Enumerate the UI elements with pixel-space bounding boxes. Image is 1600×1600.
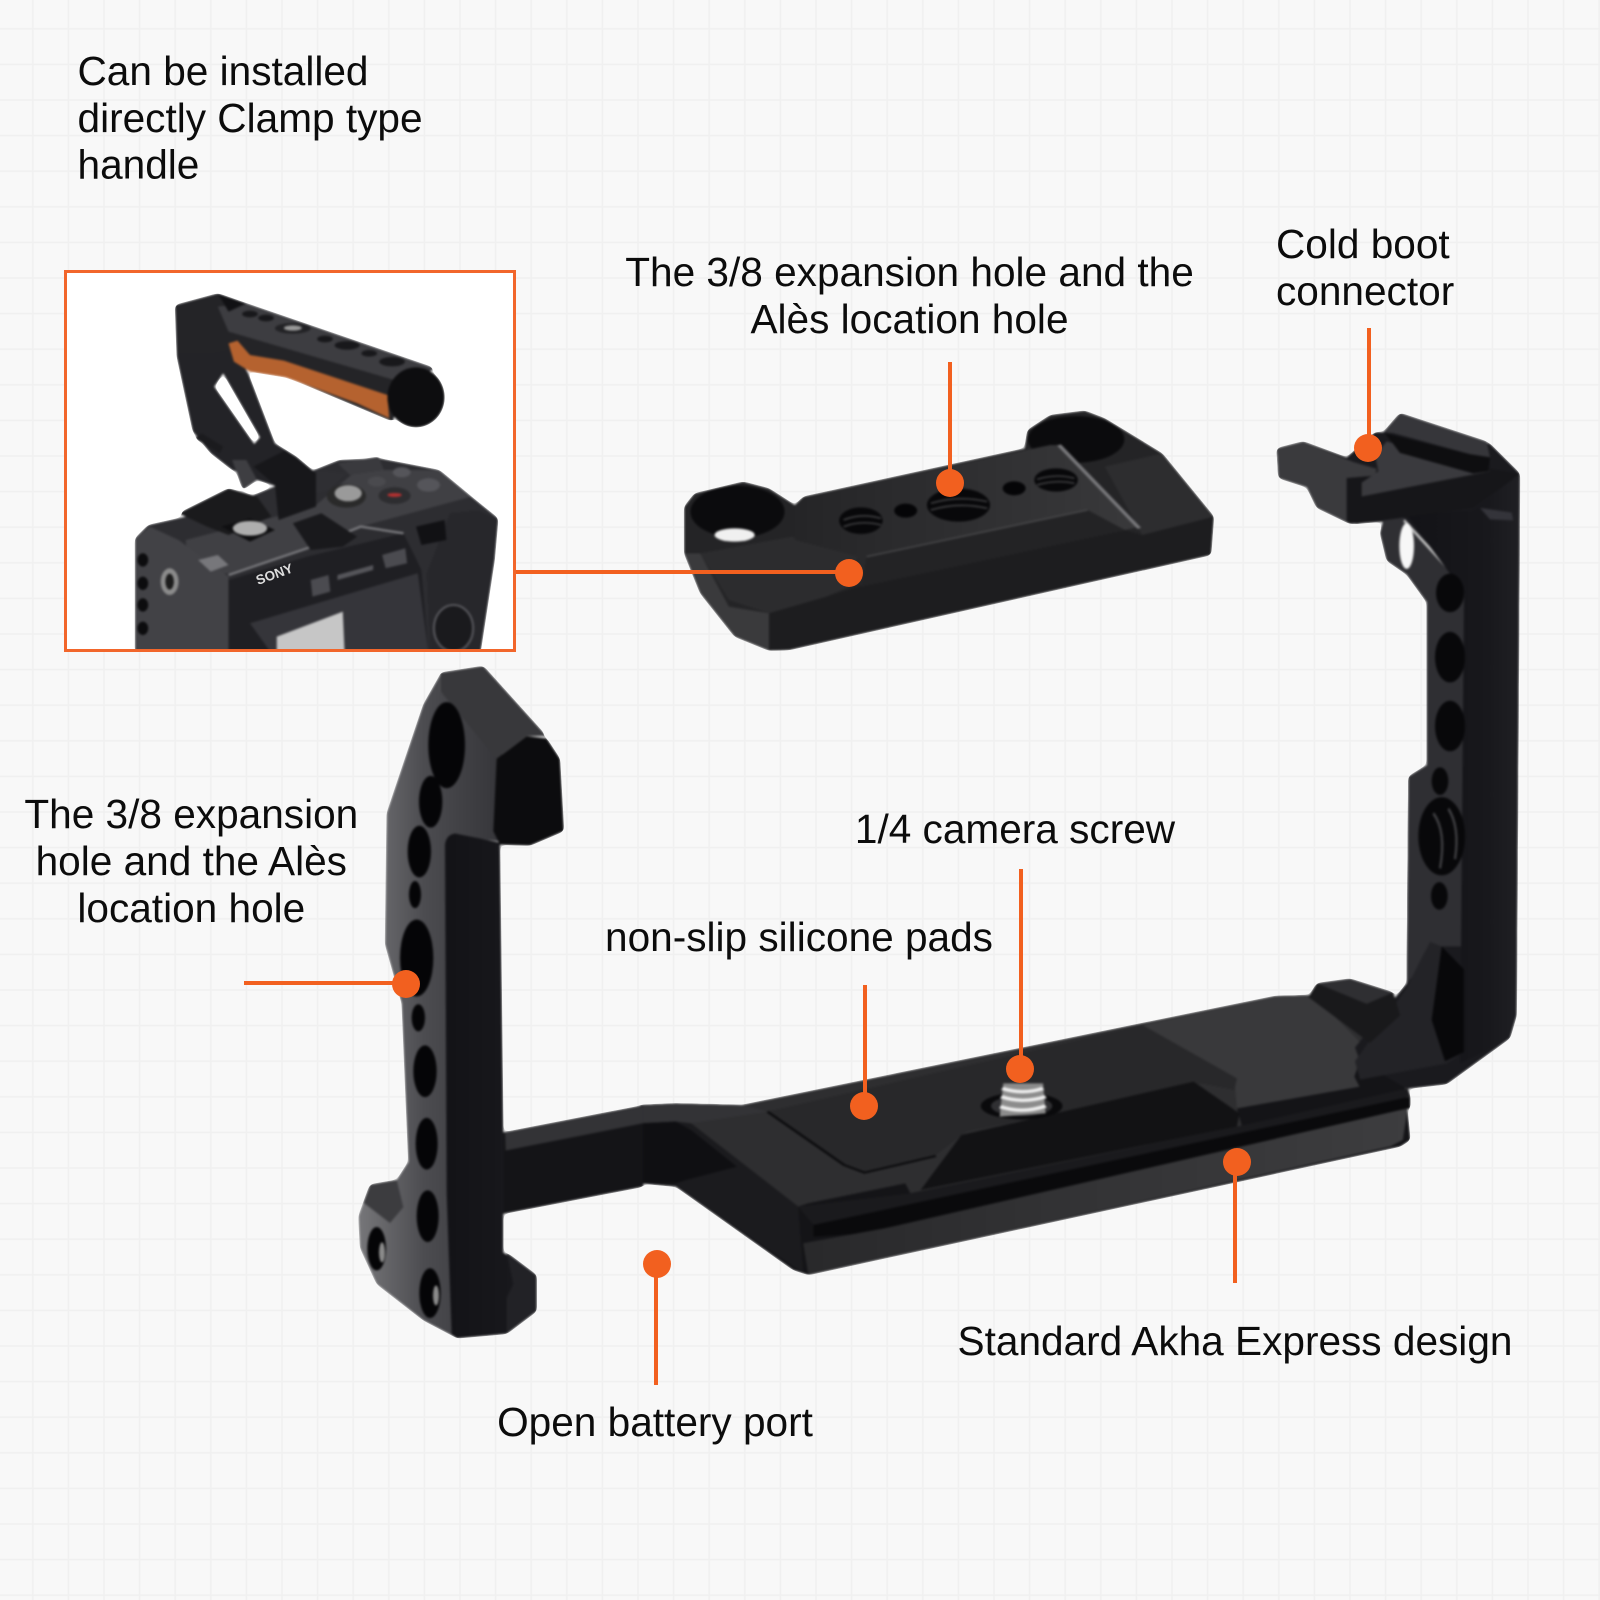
handle grip bar: [175, 293, 445, 427]
logo on camera: SONY: [254, 561, 295, 588]
text: 3/8 expansion hole, left arm: The 3/8 expansion: [24, 791, 358, 837]
callout: handle panel to clamp plate: [516, 559, 863, 587]
text: 3/8 expansion hole, clamp plate: Alès location hole: [750, 296, 1069, 342]
callout: silicone pads: [850, 985, 878, 1120]
callout: camera screw: [1006, 869, 1034, 1083]
handle bracket arm: [175, 305, 357, 550]
text: Open battery port: Open battery port: [497, 1399, 813, 1445]
product: clamp plate: [684, 411, 1214, 651]
callout: 3/8 hole on plate: [936, 362, 964, 497]
callout: Akha Express rail: [1223, 1148, 1251, 1283]
left arm: [358, 666, 643, 1338]
text: clamp handle note: directly Clamp type: [78, 95, 423, 141]
text: cold boot connector: connector: [1276, 268, 1454, 314]
text: non-slip silicone pads: non-slip silicone pads: [605, 914, 993, 960]
callout: 3/8 hole on left arm: [244, 970, 420, 998]
callout: battery port: [643, 1250, 671, 1385]
text: 3/8 expansion hole, left arm: hole and the Alès: [36, 838, 347, 884]
base plate: [640, 995, 1410, 1275]
product: L-bracket cage: [358, 413, 1520, 1338]
callout: cold boot connector: [1354, 328, 1382, 462]
right upright with cold shoe: [1277, 413, 1520, 1089]
panel: camera with clamp type handle: [64, 270, 516, 653]
camera body: [135, 457, 498, 653]
text: cold boot connector: Cold boot: [1276, 221, 1450, 267]
text: Standard Akha Express design: Standard Akha Express design: [958, 1318, 1512, 1364]
text: clamp handle note: Can be installed: [78, 48, 369, 94]
text: 3/8 expansion hole, left arm: location hole: [77, 885, 305, 931]
text: 1/4 camera screw: 1/4 camera screw: [855, 806, 1176, 852]
text: clamp handle note: handle: [78, 142, 199, 188]
text: 3/8 expansion hole, clamp plate: The 3/8 expansion hole and the: [625, 249, 1194, 295]
